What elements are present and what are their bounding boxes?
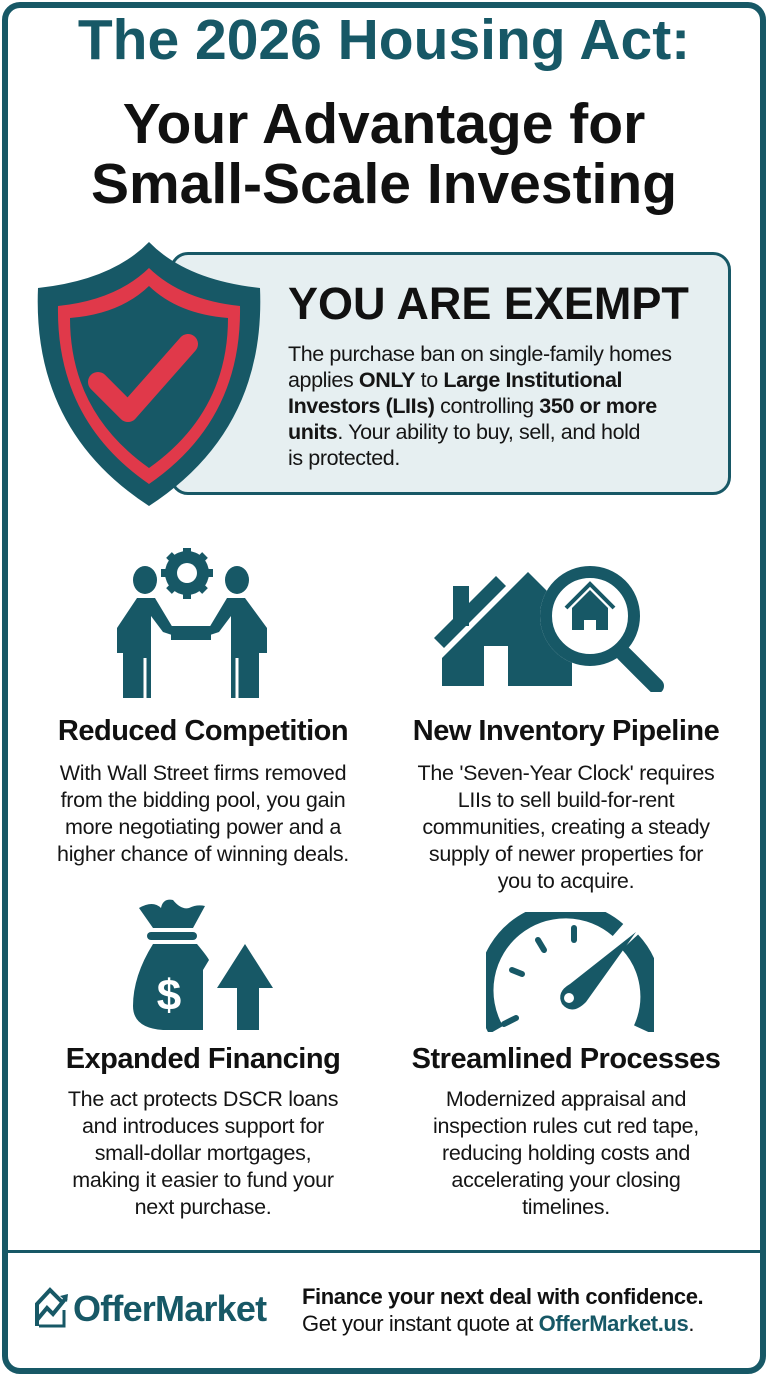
text: streamlined processes: Modernized appraisal and <box>446 1087 686 1111</box>
icon: house with magnifier <box>434 566 664 692</box>
text: reduced competition: With Wall Street firms removed <box>60 761 346 785</box>
title: The 2026 Housing Act: <box>78 8 690 72</box>
text: expanded financing: small-dollar mortgages, <box>95 1141 311 1165</box>
title: Small-Scale Investing <box>91 152 677 216</box>
text: streamlined processes: inspection rules cut red tape, <box>433 1114 699 1138</box>
text: streamlined processes: reducing holding costs and <box>442 1141 690 1165</box>
text: new inventory pipeline: The 'Seven-Year Clock' requires <box>418 761 714 785</box>
text: expanded financing: and introduces support for <box>82 1114 324 1138</box>
icon: shield with check <box>38 242 260 506</box>
text: streamlined processes: timelines. <box>522 1195 610 1219</box>
text: new inventory pipeline: you to acquire. <box>498 869 634 893</box>
callout text: applies ONLY to Large Institutional <box>288 368 622 392</box>
text: reduced competition: higher chance of winning deals. <box>57 842 349 866</box>
text: new inventory pipeline: LIIs to sell build-for-rent <box>458 788 674 812</box>
heading: new inventory pipeline: New Inventory Pipeline <box>413 715 719 747</box>
heading: expanded financing: Expanded Financing <box>66 1043 340 1075</box>
callout: you are exempt <box>170 252 731 495</box>
callout heading: YOU ARE EXEMPT <box>288 278 689 329</box>
footer cta text <box>302 1284 703 1336</box>
text: reduced competition: more negotiating power and a <box>65 815 341 839</box>
text: streamlined processes <box>433 1087 699 1219</box>
text: expanded financing: The act protects DSCR loans <box>68 1087 338 1111</box>
heading: streamlined processes: Streamlined Processes <box>412 1043 720 1075</box>
icon: speedometer <box>486 912 654 1032</box>
callout text: Investors (LIIs) controlling 350 or more <box>288 394 657 418</box>
callout text <box>288 342 672 470</box>
footer logo: OfferMarket <box>73 1288 266 1329</box>
text: expanded financing: next purchase. <box>135 1195 271 1219</box>
icon: money bag with arrow <box>133 900 273 1030</box>
text: reduced competition <box>57 761 349 866</box>
footer cta text: Get your instant quote at OfferMarket.us. <box>302 1311 694 1336</box>
text: new inventory pipeline <box>418 761 714 893</box>
callout text: units. Your ability to buy, sell, and hold <box>288 420 640 444</box>
title: Your Advantage for <box>123 92 645 156</box>
callout text: is protected. <box>288 446 400 470</box>
icon: handshake with gear <box>117 548 267 698</box>
text: streamlined processes: accelerating your closing <box>451 1168 681 1192</box>
text: new inventory pipeline: supply of newer properties for <box>429 842 703 866</box>
title <box>78 8 690 216</box>
text: new inventory pipeline: communities, creating a steady <box>422 815 710 839</box>
icon: money bag with arrow: $ <box>157 971 181 1020</box>
icon: logo house <box>35 1287 68 1328</box>
text: expanded financing: making it easier to fund your <box>72 1168 334 1192</box>
heading: reduced competition: Reduced Competition <box>58 715 348 747</box>
text: expanded financing <box>68 1087 338 1219</box>
footer cta text: Finance your next deal with confidence. <box>302 1284 703 1309</box>
text: reduced competition: from the bidding pool, you gain <box>61 788 345 812</box>
callout text: The purchase ban on single-family homes <box>288 342 672 366</box>
